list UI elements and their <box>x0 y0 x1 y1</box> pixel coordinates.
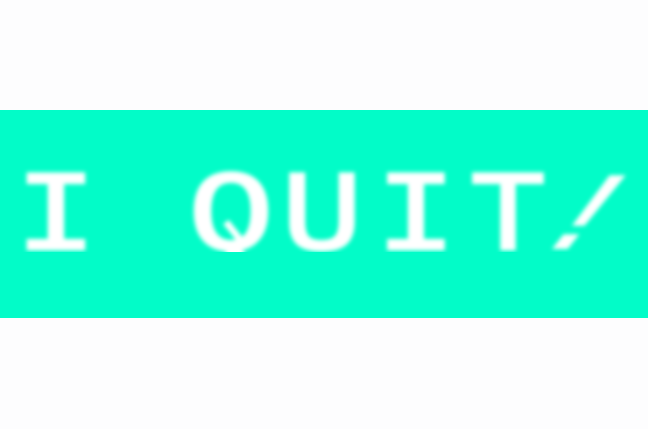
banner: I QUIT! <box>0 110 648 318</box>
teal band <box>0 110 648 318</box>
banner text <box>23 168 628 252</box>
banner text: I <box>376 155 456 284</box>
banner text: Q <box>189 154 273 284</box>
banner text: I <box>15 154 97 283</box>
Q tail <box>226 222 246 247</box>
banner text: U <box>282 155 362 284</box>
banner text: T <box>469 154 547 284</box>
